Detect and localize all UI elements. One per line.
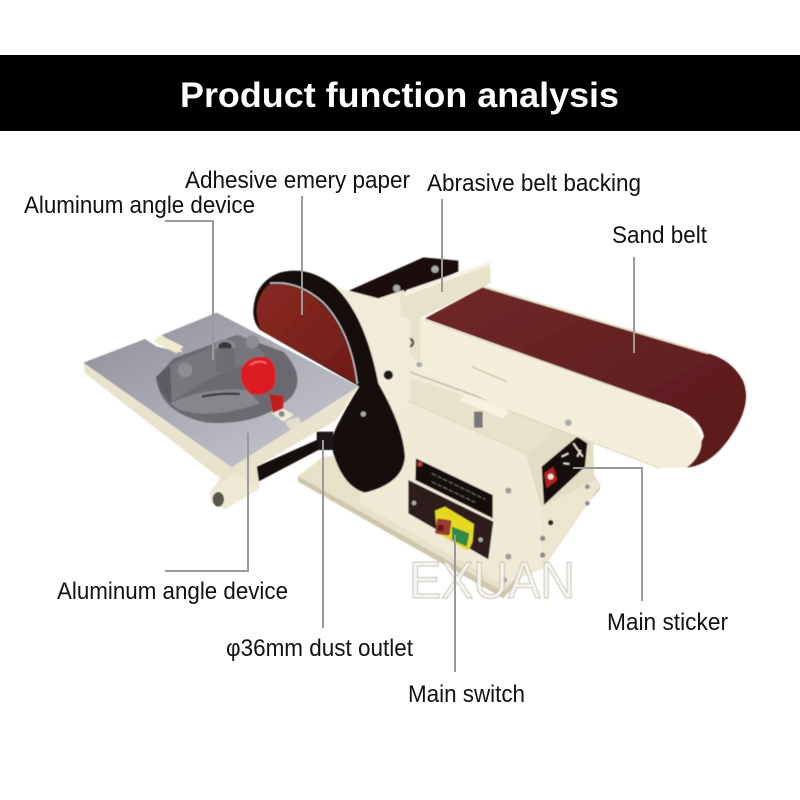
title: Product function analysis xyxy=(180,76,619,115)
belt arm cream side xyxy=(420,319,701,468)
machine illustration: belt and disc sander xyxy=(83,257,746,610)
label: aluminum angle device lower: Aluminum angle device xyxy=(57,578,288,605)
belt top edge xyxy=(483,287,708,353)
support column xyxy=(333,287,510,408)
sticker black diamond xyxy=(542,437,587,505)
aluminum table surface xyxy=(83,313,358,467)
leader line: sand belt xyxy=(633,257,635,353)
leader line: aluminum angle device (top) xyxy=(165,221,213,360)
watermark EXUAN: EXUAN xyxy=(409,552,575,610)
main switch xyxy=(435,507,474,551)
label: adhesive emery paper: Adhesive emery paper xyxy=(185,167,410,194)
title banner xyxy=(0,55,800,131)
leader line: main sticker xyxy=(573,468,642,601)
miter gauge base xyxy=(156,335,298,423)
label: dust outlet: φ36mm dust outlet xyxy=(226,635,413,662)
label: main sticker: Main sticker xyxy=(607,609,728,636)
leader line: aluminum angle device (lower) xyxy=(165,433,248,571)
adhesive emery disc xyxy=(257,284,357,384)
bracket tab and adjuster xyxy=(459,392,512,418)
cream motor mount xyxy=(340,288,410,417)
leader line: abrasive belt backing xyxy=(441,199,443,292)
dust outlet pipe xyxy=(317,432,333,450)
leader line: dust outlet xyxy=(322,440,324,628)
base plate xyxy=(298,476,600,598)
table lower cream edge and support xyxy=(83,363,358,509)
disc sander group xyxy=(83,271,410,509)
label: sand belt: Sand belt xyxy=(612,222,707,249)
abrasive belt backing plate xyxy=(400,262,491,363)
box right face xyxy=(527,425,600,568)
leader line: adhesive emery paper xyxy=(301,196,303,315)
machine body, base and belt arm xyxy=(298,257,746,598)
top deck of box xyxy=(390,370,553,453)
control plate xyxy=(415,458,493,518)
leader line: main switch xyxy=(454,535,456,672)
under table rail xyxy=(257,440,318,482)
red knob and clamp xyxy=(241,357,294,422)
label: aluminum angle device top: Aluminum angle device xyxy=(24,192,255,219)
rear black motor housing xyxy=(347,257,458,303)
box front face xyxy=(360,387,543,585)
label: abrasive belt backing: Abrasive belt backing xyxy=(427,170,641,197)
black disc guard and arm xyxy=(253,271,405,493)
sand belt xyxy=(425,287,746,468)
miter fence xyxy=(170,335,267,402)
label: main switch: Main switch xyxy=(408,681,525,708)
